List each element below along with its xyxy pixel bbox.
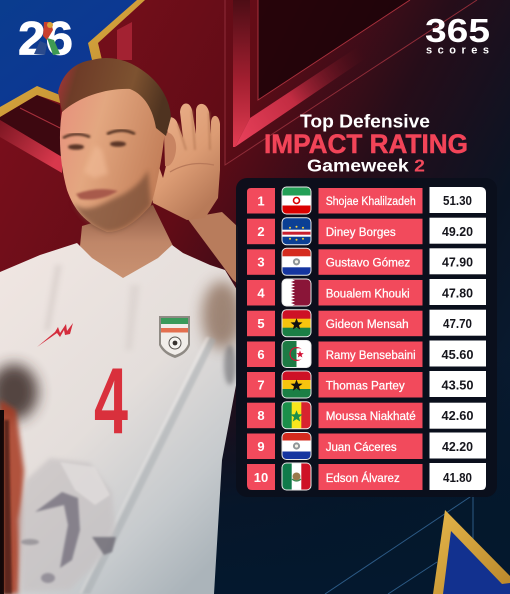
- blue star corner with gold edge, bottom right: [325, 495, 510, 594]
- shirt crest: [159, 316, 190, 358]
- row 3: 47.90: [442, 255, 473, 270]
- row 5: [247, 310, 486, 337]
- brand logo: 365 scores: scores: [426, 44, 489, 56]
- row 4: [247, 279, 486, 306]
- row 2: [247, 218, 486, 245]
- row 10: Edson Álvarez: [326, 470, 400, 485]
- row 7: 43.50: [442, 378, 474, 392]
- player hand: [147, 103, 220, 220]
- row 4: Boualem Khouki: [326, 286, 410, 300]
- row 1: [247, 187, 486, 214]
- row 8: 42.60: [442, 408, 474, 423]
- player mouth: [76, 189, 118, 200]
- player photo illustration: [0, 58, 242, 594]
- row 8: 8: [257, 408, 265, 423]
- row 5: Gideon Mensah: [326, 317, 409, 331]
- row 2: Diney Borges: [326, 225, 396, 239]
- row 5: 5: [257, 316, 265, 331]
- row 7: [247, 371, 486, 398]
- row 10: 10: [254, 470, 268, 485]
- shirt graphic: cheetah: [18, 458, 116, 592]
- flag: Paraguay: [282, 432, 311, 460]
- row 3: [247, 248, 486, 275]
- row 5: 47.70: [443, 316, 472, 331]
- row 1: 51.30: [443, 193, 472, 208]
- flag: Cape Verde: [282, 218, 311, 245]
- flag: Iran: [282, 187, 311, 214]
- row 10: [247, 463, 486, 490]
- red chevron graphics: [0, 0, 477, 173]
- player shirt: [0, 235, 242, 594]
- player beard: [72, 170, 151, 232]
- row 9: Juan Cáceres: [326, 440, 397, 454]
- row 8: [247, 402, 486, 429]
- row 9: [247, 432, 486, 460]
- flag: Senegal: [282, 402, 311, 429]
- flag: Ghana: [282, 310, 311, 337]
- row 7: Thomas Partey: [326, 378, 406, 392]
- row 8: Moussa Niakhaté: [326, 409, 416, 423]
- player hair: [58, 58, 171, 136]
- row 7: 7: [257, 378, 265, 392]
- flag: Mexico: [282, 463, 311, 490]
- row 9: 42.20: [442, 439, 473, 454]
- title block: Gameweek 2: [307, 156, 425, 176]
- row 1: Shojae Khalilzadeh: [326, 194, 416, 208]
- row 6: 45.60: [442, 347, 474, 362]
- player neck: [80, 205, 173, 279]
- row 3: Gustavo Gómez: [326, 256, 410, 270]
- row 2: 49.20: [442, 224, 473, 239]
- row 1: 1: [257, 194, 265, 208]
- shirt number: 4: [94, 348, 128, 453]
- player ear: [164, 132, 176, 166]
- brand logo: 365 scores: 365: [425, 12, 490, 49]
- row 9: 9: [257, 439, 265, 454]
- player arm: [187, 212, 238, 284]
- flag: Algeria: [282, 340, 311, 368]
- row 6: [247, 340, 486, 368]
- ranking table panel: [236, 178, 497, 497]
- row 6: 6: [257, 347, 265, 362]
- title block: Top Defensive: [300, 110, 430, 132]
- row 4: 4: [257, 285, 265, 300]
- player nose: [84, 145, 108, 178]
- title block: [264, 110, 468, 176]
- flag: Qatar: [282, 279, 311, 306]
- tournament logo 26: 26: [18, 12, 73, 64]
- row 4: 47.80: [442, 285, 473, 300]
- row 10: 41.80: [443, 470, 472, 485]
- player face: [60, 88, 165, 232]
- title block: IMPACT RATING: [264, 129, 468, 159]
- row 2: 2: [257, 224, 265, 239]
- row 3: 3: [257, 255, 265, 270]
- blue star corner with gold edge, top left: [0, 0, 145, 117]
- flag: Ghana: [282, 371, 311, 398]
- shirt brand logo: [37, 323, 73, 347]
- player eyes and brows: [63, 130, 135, 150]
- flag: Paraguay: [282, 248, 311, 275]
- row 6: Ramy Bensebaini: [326, 348, 416, 362]
